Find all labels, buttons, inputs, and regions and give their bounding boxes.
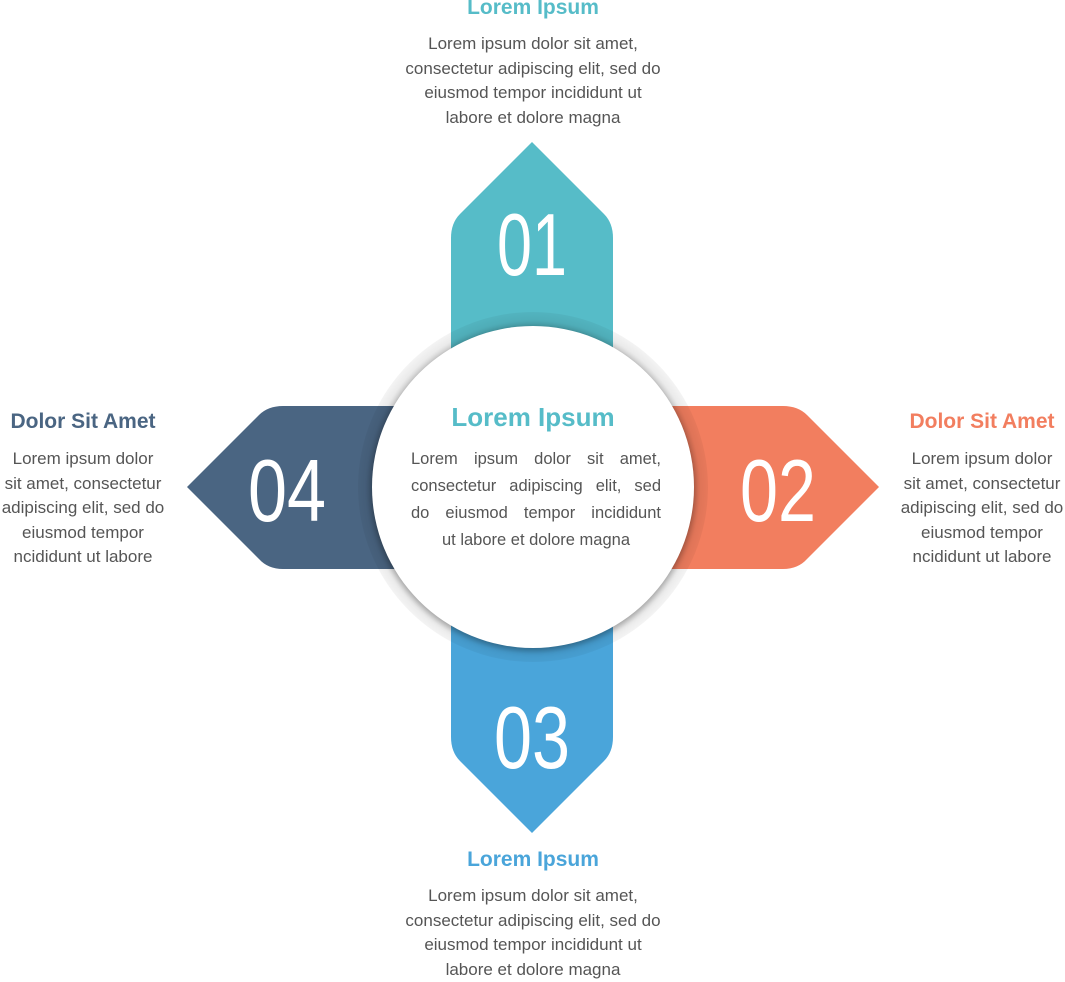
top text: labore et dolore magna <box>446 108 620 126</box>
arrow 03 bottom <box>451 600 613 833</box>
right text: ncididunt ut labore <box>913 547 1051 566</box>
top text <box>405 34 661 126</box>
right text <box>901 449 1063 566</box>
left text: sit amet, consectetur <box>5 474 161 492</box>
bottom text: consectetur adipiscing elit, sed do <box>405 910 661 930</box>
left heading: Dolor Sit Amet <box>10 410 156 433</box>
center text: do eiusmod tempor incididunt <box>411 504 661 522</box>
right text: eiusmod tempor <box>921 522 1043 542</box>
right text: adipiscing elit, sed do <box>901 498 1063 517</box>
center text: Lorem ipsum dolor sit amet, <box>411 450 661 468</box>
center text: ut labore et dolore magna <box>442 531 630 549</box>
top text: eiusmod tempor incididunt ut <box>424 83 642 102</box>
bottom text: labore et dolore magna <box>446 960 620 978</box>
left text: ncididunt ut labore <box>14 547 152 566</box>
bottom text: Lorem ipsum dolor sit amet, <box>428 886 638 905</box>
left text: adipiscing elit, sed do <box>2 498 164 517</box>
center text <box>411 450 661 549</box>
right text: sit amet, consectetur <box>904 474 1060 492</box>
ring <box>358 312 708 662</box>
top text: Lorem ipsum dolor sit amet, <box>428 34 638 53</box>
bottom text <box>405 886 661 978</box>
center circle <box>372 326 694 648</box>
center heading: Lorem Ipsum <box>451 402 615 432</box>
arrow 01 top: 01 <box>497 195 567 294</box>
arrow 04 left <box>187 406 410 569</box>
left text: eiusmod tempor <box>22 522 144 542</box>
left text <box>2 449 164 566</box>
top text: consectetur adipiscing elit, sed do <box>405 58 661 78</box>
arrow 03 bottom: 03 <box>494 688 570 787</box>
arrow 04 left: 04 <box>248 441 326 540</box>
right heading: Dolor Sit Amet <box>909 410 1055 433</box>
center text: consectetur adipiscing elit, sed <box>411 477 661 495</box>
bottom text: eiusmod tempor incididunt ut <box>424 935 642 954</box>
arrow 02 right <box>650 406 879 569</box>
bottom heading: Lorem Ipsum <box>467 848 599 871</box>
arrow 01 top <box>451 142 613 380</box>
arrow 02 right: 02 <box>740 441 816 540</box>
right text: Lorem ipsum dolor <box>912 449 1052 468</box>
left text: Lorem ipsum dolor <box>13 449 153 468</box>
